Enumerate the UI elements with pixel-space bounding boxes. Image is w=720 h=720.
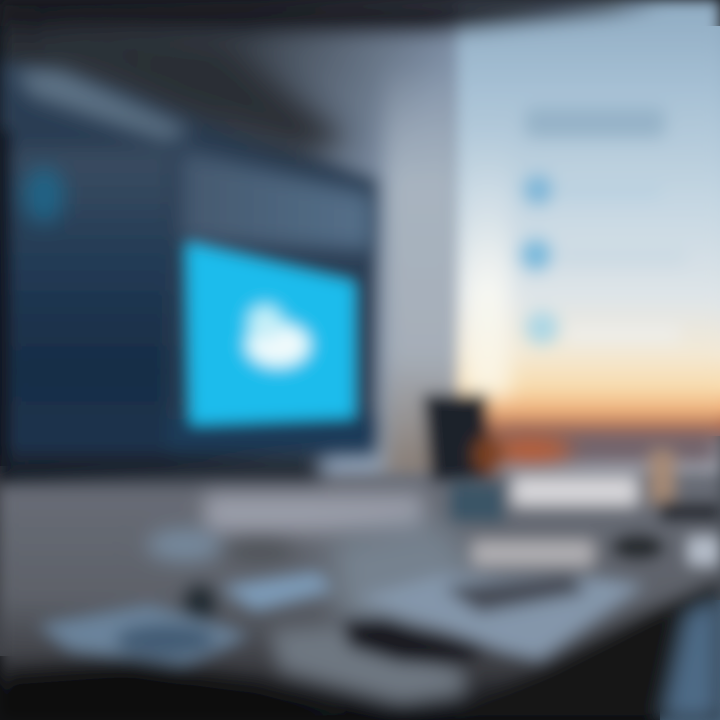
- horizon band: [500, 432, 720, 466]
- corner blue glare: [660, 595, 720, 720]
- sidebar panel: [12, 150, 170, 465]
- white cloud icon: [245, 304, 311, 368]
- right light patch: [688, 537, 720, 565]
- blurred list on window: [520, 108, 685, 345]
- desk light band: [205, 494, 423, 532]
- far right dark blob: [612, 534, 664, 560]
- keyboard: [358, 575, 645, 660]
- dark shadow below monitor: [0, 455, 320, 481]
- bright strip: [465, 130, 510, 395]
- left paper: [38, 605, 250, 668]
- bottom dark foreground: [0, 662, 380, 720]
- dark object right: [660, 502, 720, 522]
- glass on right: [650, 450, 674, 505]
- mouse: [183, 584, 217, 622]
- monitor body: [0, 60, 378, 478]
- wall beside window: [385, 60, 460, 480]
- window with sunset sky: [458, 0, 720, 466]
- bottom right dark edge: [450, 580, 720, 720]
- blue desk blob: [147, 529, 223, 561]
- orange reflection: [488, 437, 572, 463]
- blue paper: [222, 572, 333, 610]
- dark shape under keyboard: [345, 620, 480, 662]
- mid right light patch: [472, 540, 594, 567]
- left dark edge: [0, 130, 10, 490]
- monitor top glare: [15, 70, 190, 142]
- dark diagonal over monitor: [40, 30, 350, 155]
- desk middle: [330, 520, 480, 640]
- mug: [424, 395, 504, 522]
- blue window: [186, 242, 355, 425]
- sidebar highlight: [24, 167, 64, 223]
- desk surface: [0, 472, 720, 720]
- front desk strip: [270, 625, 465, 705]
- lower screen bezel: [170, 415, 375, 455]
- dark desk blob: [224, 539, 296, 563]
- upper screen panel: [180, 150, 372, 250]
- top dark band: [0, 0, 660, 30]
- monitor: [0, 30, 378, 490]
- upper right desk highlight: [512, 476, 638, 506]
